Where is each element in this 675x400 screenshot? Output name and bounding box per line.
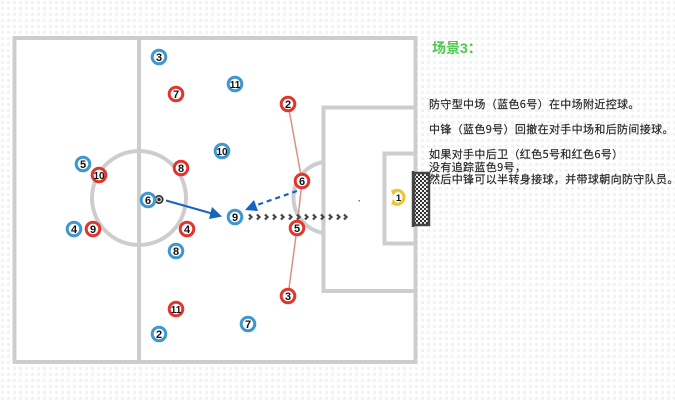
red players: 4 [184,224,191,236]
description text: 然后中锋可以半转身接球，并带球朝向防守队员。 [429,171,675,187]
blue players: 5 [80,159,86,171]
chevron run path of blue 9 [249,214,346,220]
red defensive line [288,104,302,296]
blue players: 3 [156,52,162,64]
blue players: 10 [216,147,228,158]
arrow: pass from blue 6 [166,200,222,219]
red players: 9 [90,224,96,236]
blue players: 6 [145,195,151,207]
red players: 2 [285,99,291,111]
arrow: dashed run of blue 9 [245,191,297,211]
blue players: 2 [156,329,162,341]
description text: 防守型中场（蓝色6号）在中场附近控球。 [429,96,640,112]
red players: 5 [294,223,300,235]
blue players: 8 [173,246,179,258]
goalkeeper [391,190,404,204]
description text: 没有追踪蓝色9号， [429,159,526,175]
description text [429,96,675,187]
ball [155,196,163,203]
goal net [413,171,429,227]
red players: 10 [93,171,105,182]
red players: 6 [299,176,305,188]
red players: 3 [285,291,291,303]
red players: 7 [173,89,179,101]
red players: 11 [171,305,182,316]
goalkeeper: 1 [396,193,402,204]
penalty spot [358,200,360,202]
blue players: 11 [230,80,241,91]
red players: 8 [178,163,184,175]
description text: 中锋（蓝色9号）回撤在对手中场和后防间接球。 [429,121,674,137]
football pitch [14,38,416,362]
blue players: 4 [71,224,78,236]
blue players: 7 [245,319,251,331]
description text: 如果对手中后卫（红色5号和红色6号） [429,146,624,162]
blue players: 9 [232,212,238,224]
title: 场景3： [432,40,482,56]
red players [86,87,309,316]
blue players [67,50,255,341]
